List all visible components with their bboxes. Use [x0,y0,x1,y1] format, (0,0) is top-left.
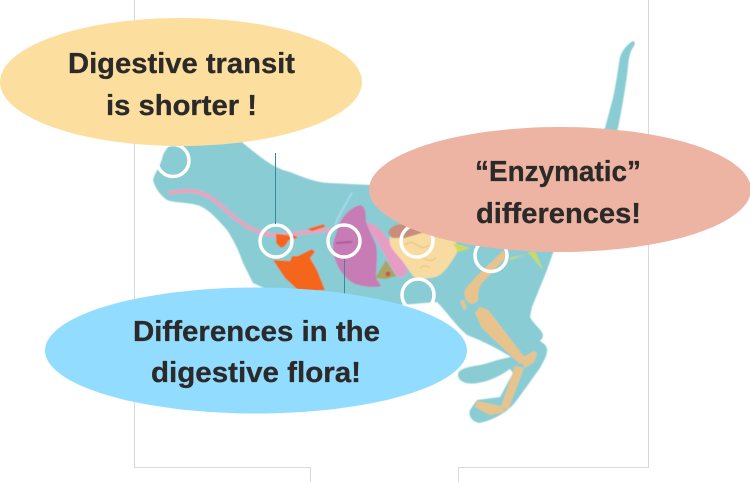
marker rings [157,144,507,311]
metatarsal [501,366,524,410]
green tract [453,243,543,270]
ring: pancreas [402,279,434,311]
callout: digestive flora [45,288,467,414]
intestine folds [405,242,436,268]
patella [460,300,467,310]
femur [465,251,507,304]
heel [520,351,537,368]
callout: digestive flora: Differences in the [133,316,380,348]
ring: stomach [328,225,360,257]
stomach [333,205,381,287]
cat body silhouette [153,41,635,423]
callout: digestive transit: Digestive transit [68,48,295,80]
ring: mouth [157,144,189,176]
leg bones [460,251,537,415]
stomach fold [336,242,352,243]
kidney detail [375,260,396,279]
esophagus [168,191,332,235]
blue vessel [335,193,352,225]
liver detail [276,224,325,248]
colon [388,224,425,238]
leader line: flora [344,259,346,294]
liver [273,249,325,292]
cat anatomy illustration [153,41,635,423]
callout: digestive flora: digestive flora! [151,357,361,389]
ring: small intestine [401,225,433,257]
callout: enzymatic differences: “Enzymatic” [475,156,641,188]
toes [475,401,506,415]
callout: enzymatic differences [369,127,750,252]
callout: enzymatic differences: differences! [476,198,641,230]
small intestine [390,230,458,278]
leader line: transit [274,153,276,224]
pancreas [366,222,407,277]
tibia [475,307,526,364]
callout: digestive transit: is shorter ! [106,90,257,122]
callout: digestive transit [0,18,362,146]
ring: colon [475,240,507,272]
ring: esophagus [260,225,292,257]
